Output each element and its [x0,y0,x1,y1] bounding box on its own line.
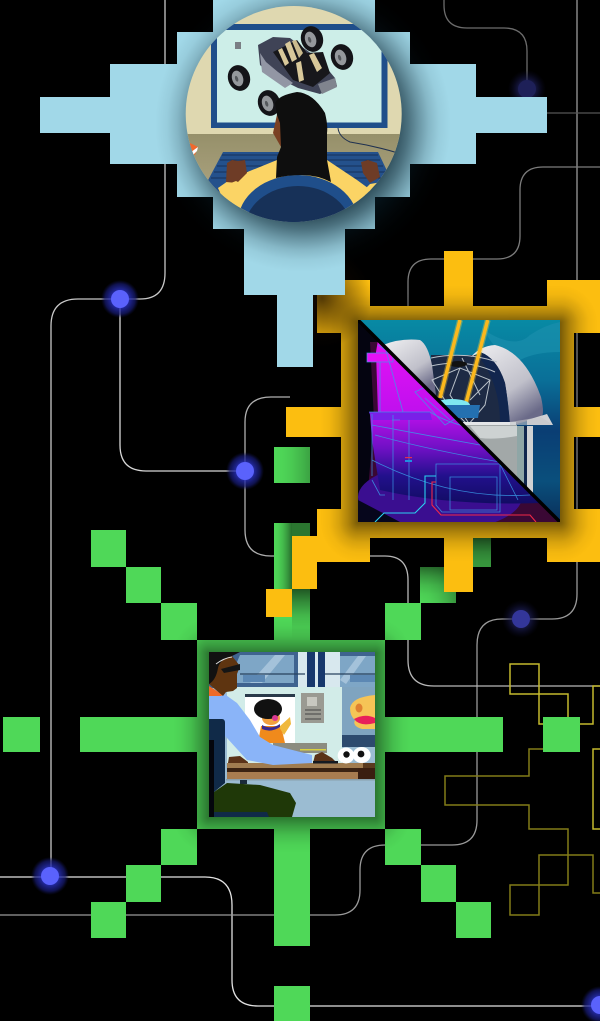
yellow outline circuit [445,664,600,915]
illustration: engineer at desk [209,652,375,817]
green image shadow [173,618,411,853]
yellow frame cast shadow on green [274,447,491,640]
illustration: designer viewing exploded car [186,6,402,222]
green pixel cross [3,447,580,1021]
circle shadow on blue cross [155,0,451,272]
light-blue pixel cross [40,0,547,367]
yellow pixel frame [266,251,600,617]
yellow frame image shadow [320,285,598,562]
illustration: telescope observatory split [358,320,560,531]
car parts [228,26,354,116]
blue stem cast shadow [272,248,372,348]
